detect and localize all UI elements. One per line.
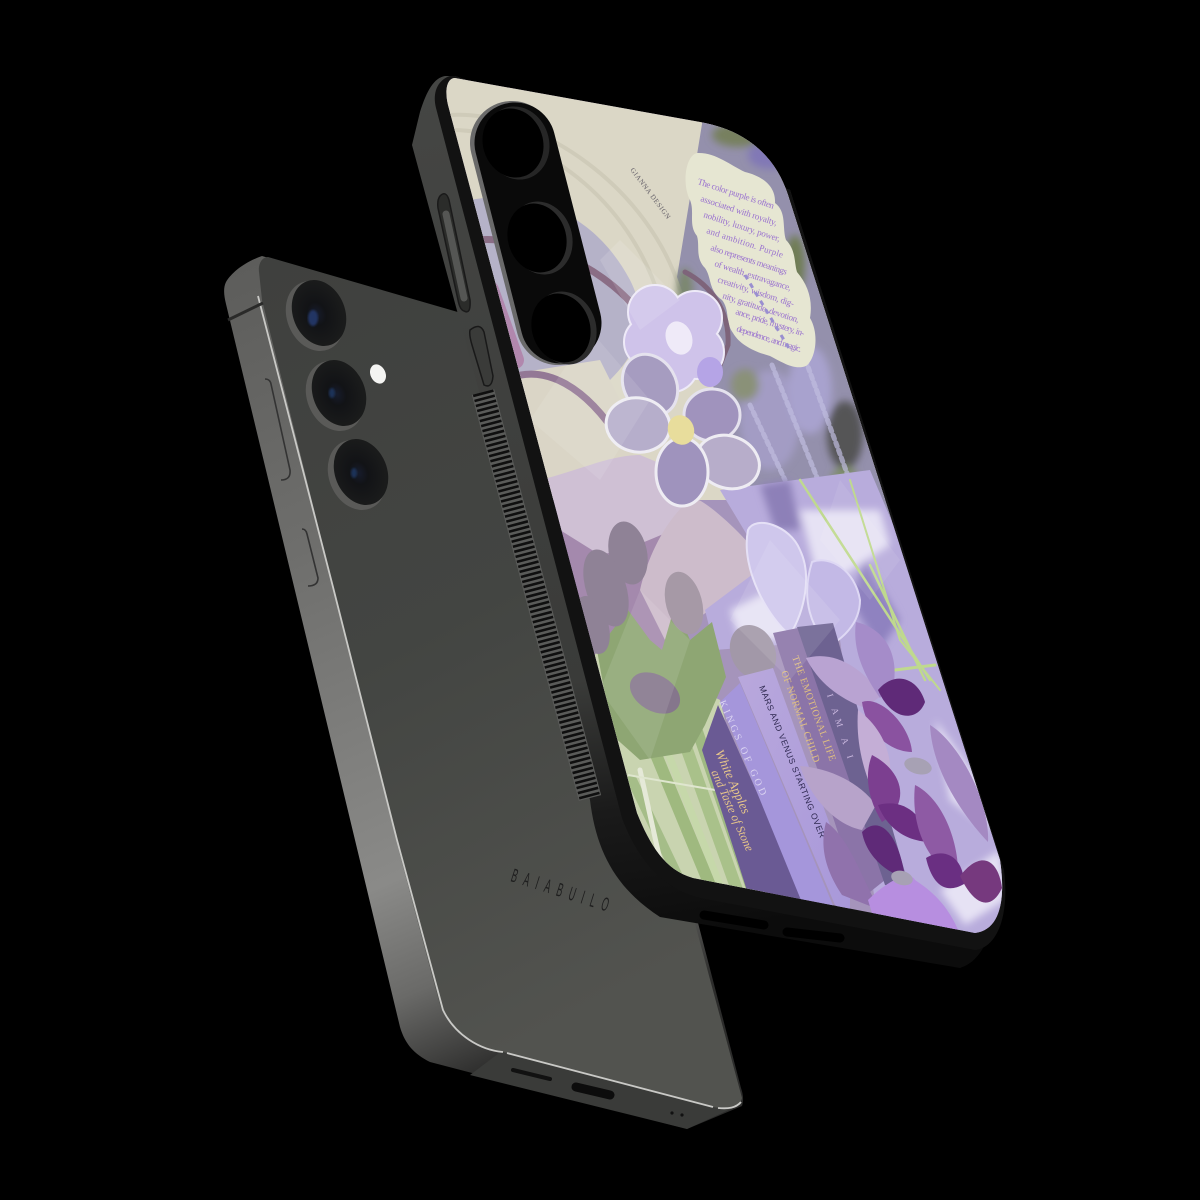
back phone: [224, 256, 743, 1129]
green sprigs: [800, 480, 940, 690]
quote note: associated with royalty,: [699, 193, 779, 228]
pansy flower: [602, 344, 767, 506]
side grille: [483, 392, 590, 798]
book: emotional life: [773, 628, 885, 900]
camera lens 3: [318, 431, 398, 519]
croc handbag: [548, 455, 682, 554]
camera lens 2: [296, 352, 376, 440]
lavender sprigs: [748, 362, 850, 482]
satin fabric: [705, 470, 1010, 940]
bag strap: [475, 240, 728, 365]
page lettering: GIANNA DESIGN: [628, 166, 672, 221]
quote note: creativity, wisdom, dig-: [716, 274, 796, 309]
glass reflections: [530, 240, 900, 760]
power button: [470, 326, 493, 386]
lilac perfume dress: [868, 877, 958, 930]
case inner dark rim: [435, 76, 1005, 950]
quote note: nity, gratitude, devotion,: [721, 290, 801, 325]
phone case: [412, 60, 1030, 968]
second strap: [519, 370, 606, 424]
antenna line: [228, 303, 263, 320]
bag shadow side: [558, 518, 665, 680]
stems backdrop: [595, 654, 768, 893]
base colour: [446, 78, 1002, 933]
lilac backdrop: [470, 197, 640, 400]
bottom edge: [470, 1050, 742, 1129]
quote note: of wealth, extravagance,: [713, 258, 793, 293]
butterfly right: [914, 725, 1002, 903]
phone side frame: [224, 256, 743, 1129]
side buttons: [265, 379, 318, 586]
product mockup scene: [224, 76, 1006, 1129]
usb port: [576, 1087, 610, 1095]
book titles: [708, 654, 857, 854]
quote note: dependence, and magic.: [735, 323, 803, 354]
book titles: KINGS OF GOD: [716, 699, 769, 800]
book: i am a: [797, 623, 910, 890]
vase band: [628, 775, 715, 790]
frame highlight line: [258, 296, 741, 1108]
quote note: nobility, luxury, power,: [702, 209, 782, 244]
tulip buds: [580, 522, 776, 714]
satin highlights: [730, 480, 1005, 925]
quote note: also represents meanings: [709, 242, 789, 277]
case bottom port right: [787, 932, 840, 938]
quote note: The color purple is often: [696, 176, 776, 211]
case bottom port left: [704, 915, 764, 925]
butterfly lower left: [823, 822, 872, 906]
brand wordmark: BAIABUILO: [508, 865, 612, 916]
book: white apples: [702, 705, 805, 900]
speaker slot: [513, 1070, 550, 1079]
lens hole 1: [474, 98, 559, 188]
case side wall: [412, 76, 1003, 968]
silver bottle caps: [891, 758, 932, 886]
camera lens 1: [276, 272, 356, 360]
tulip leaves: [597, 605, 726, 760]
microphone holes: [670, 1111, 684, 1117]
artwork collage: [446, 78, 1002, 933]
butterfly top: [806, 622, 925, 752]
butterfly middle: [800, 710, 932, 878]
page curves: [450, 115, 680, 300]
book titles: OF NORMAL CHILD: [778, 669, 822, 764]
book titles: THE EMOTIONAL LIFE: [789, 654, 838, 763]
book titles: White Apples: [712, 747, 754, 816]
quote note: and ambition. Purple: [705, 225, 785, 260]
tulip stems: [632, 730, 752, 890]
volume button: [438, 194, 470, 312]
quote note: [686, 153, 816, 367]
cream page: [446, 78, 886, 500]
field texture: [677, 123, 863, 514]
book titles: I AM A I: [825, 693, 857, 764]
camera island: [474, 98, 606, 373]
cream lower area: [520, 360, 610, 498]
flash: [367, 362, 389, 386]
book: mars and venus: [738, 668, 850, 915]
lilac flower: [625, 286, 723, 391]
lens hole 3: [523, 283, 606, 373]
back glass: [259, 257, 742, 1108]
quote note: ance, pride, mystery, in-: [734, 306, 806, 338]
lavender field: [677, 118, 900, 530]
glass hearts: [747, 523, 860, 645]
handbag clutch: [640, 500, 751, 640]
lens hole 2: [499, 193, 582, 283]
book titles: MARS AND VENUS STARTING OVER: [757, 684, 828, 840]
book: kings of god: [720, 683, 837, 915]
book titles: and Taste of Stone: [708, 768, 757, 854]
